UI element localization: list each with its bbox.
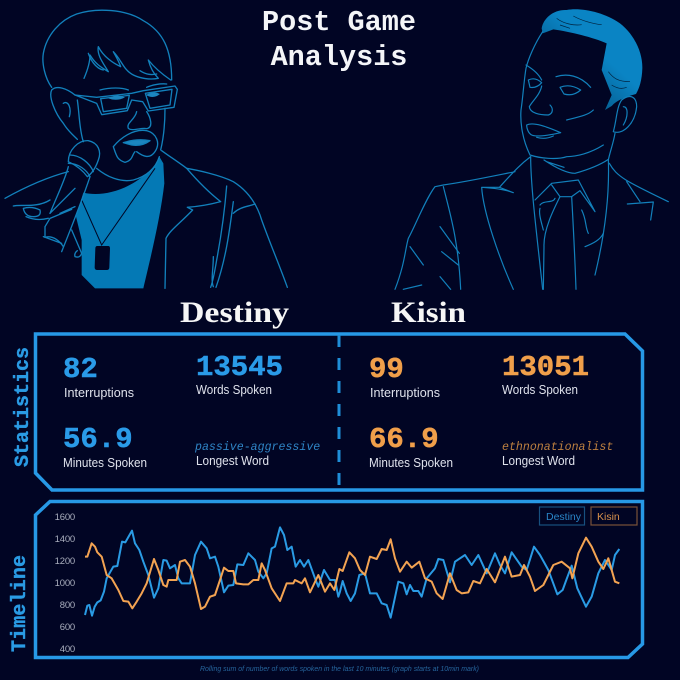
Kisin stats: 66.9 [369, 423, 439, 456]
y axis labels: 400 [60, 644, 75, 655]
title: Analysis [271, 41, 407, 74]
Destiny stats: Longest Word [196, 453, 269, 468]
title [262, 6, 416, 74]
Destiny stats: 56.9 [63, 423, 133, 456]
frame [36, 502, 642, 658]
glasses [75, 86, 177, 115]
y axis labels [55, 512, 75, 655]
nose [128, 112, 151, 130]
collar and tie [531, 157, 609, 289]
eyes [108, 93, 160, 100]
heading: Kisin: Kisin [391, 296, 466, 329]
Kisin stats [369, 351, 613, 470]
Destiny stats: 82 [63, 353, 98, 386]
Kisin stats: Minutes Spoken [369, 455, 453, 470]
Destiny stats: 13545 [196, 351, 283, 384]
legend: Kisin [597, 511, 620, 523]
Destiny stats: passive-aggressive [194, 441, 320, 454]
caption: Rolling sum of number of words spoken in the last 10 minutes (graph starts at 10min mark) [200, 666, 479, 673]
jacket [162, 151, 287, 288]
heading: Destiny: Destiny [180, 296, 289, 329]
Kisin stats: 99 [369, 353, 404, 386]
Destiny stats [63, 351, 320, 470]
Kisin stats: Longest Word [502, 453, 575, 468]
necklace and dog tag [82, 168, 155, 270]
label: Timeline: Timeline [9, 555, 32, 652]
face and neck outline [521, 32, 637, 160]
Destiny stats: Minutes Spoken [63, 455, 147, 470]
y axis labels: 1200 [55, 556, 75, 567]
legend [540, 507, 637, 525]
y axis labels: 1000 [55, 578, 75, 589]
legend: Destiny [546, 511, 582, 523]
hair and head outline [43, 10, 172, 181]
hair shadow strokes [557, 16, 630, 88]
illustration: Destiny portrait [5, 10, 287, 288]
Destiny stats: Interruptions [64, 385, 134, 400]
y axis labels: 800 [60, 600, 75, 611]
goatee and mouth [113, 130, 158, 162]
Kisin stats: Interruptions [370, 385, 440, 400]
title: Post Game [262, 6, 416, 39]
y axis labels: 1600 [55, 512, 75, 523]
Kisin stats: Words Spoken [502, 382, 578, 397]
line: Destiny [85, 527, 619, 618]
illustration: Kisin portrait [395, 9, 668, 289]
Kisin stats: ethnonationalist [502, 441, 613, 454]
y axis labels: 600 [60, 622, 75, 633]
shirt [76, 157, 164, 288]
suit jacket [395, 157, 668, 289]
divider [338, 335, 340, 489]
microphone and hand [5, 141, 100, 257]
Destiny stats: Words Spoken [196, 382, 272, 397]
label: Statistics: Statistics [12, 347, 35, 467]
Kisin stats: 13051 [502, 351, 589, 384]
panel: statistics [36, 334, 642, 490]
hair [542, 9, 642, 110]
panel: timeline [36, 502, 642, 658]
frame [36, 334, 642, 490]
y axis labels: 1400 [55, 534, 75, 545]
line: Kisin [85, 538, 619, 609]
